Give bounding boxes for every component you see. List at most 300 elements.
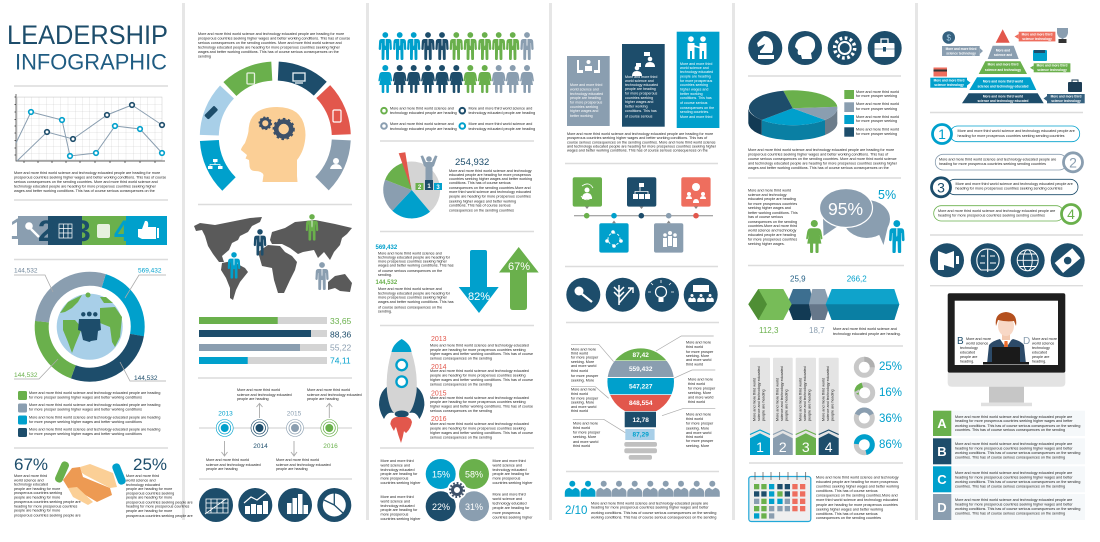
rocket milestones: higher wages and better working conditions. This has of course [430, 431, 533, 435]
percent labels [879, 361, 902, 451]
donut legend: for more prosper seeking higher wages and better working conditions [29, 408, 142, 412]
lettered list: countries. This has of course serious consequences on the sending [955, 512, 1065, 516]
bulb callouts: third world [571, 392, 588, 396]
pyramid [962, 29, 1044, 103]
speech text: countries.More and more third [748, 224, 797, 228]
timeline: people are heading [276, 467, 308, 471]
bulb callouts: seeking. More [688, 391, 711, 395]
bulb callouts: seeking. More [686, 354, 709, 358]
text beside percent circles: people are heading for [380, 508, 418, 512]
bulb callouts: for more prosper [571, 396, 599, 400]
calendar description: educated people are heading for more prosperous [816, 480, 898, 484]
text beside percent circles: countries seeking higher [380, 481, 421, 485]
four percent circles with gear: 22% [432, 502, 450, 512]
percent labels: 25% [879, 361, 902, 373]
bulb callouts: for more prosper [686, 422, 714, 426]
numbered vertical cards: science and technology educated [803, 366, 807, 421]
column 2 intro text: prosperous countries seeking higher wages and better working conditions. This has of course [198, 36, 350, 40]
column dividers [182, 3, 918, 520]
monitor [948, 293, 1065, 406]
rocket milestones [430, 336, 533, 440]
rocket milestones: More and more third world science and technology educated [430, 344, 529, 348]
calendar [749, 472, 811, 522]
pyramid icons: $ [946, 34, 951, 42]
hexagon prism chart: 25,9 [790, 274, 806, 284]
pie description: course serious consequences on the sending countries. More and more third world science [748, 157, 897, 161]
line chart [14, 94, 165, 163]
text beside percent circles: technology educated [380, 504, 415, 508]
ring of technology icons [182, 44, 369, 230]
bulb callouts: More and more [688, 378, 713, 382]
rocket milestones: serious consequences on the sending [430, 409, 492, 413]
monitor callouts: More and more [1032, 337, 1057, 341]
numbered vertical cards: people are heading [784, 389, 788, 421]
calendar description: conditions. This has of course serious [816, 489, 878, 493]
speech text: seeking higher wages and [748, 206, 791, 210]
bulb callouts: for more prosper [686, 439, 714, 443]
pyramid: More and [996, 48, 1010, 52]
hexagon prism chart: 112,3 [759, 326, 779, 335]
three stepped info cards: higher wages and [625, 100, 653, 104]
text beside percent circles: more prosperous [380, 476, 409, 480]
pictogram legend: More and more third world science and [468, 122, 532, 126]
numbered vertical cards: people are heading [762, 389, 766, 421]
pyramid callouts: More and more third [1051, 94, 1081, 98]
puzzle banner: 2 [38, 215, 55, 248]
pie stat and text: conditions. This has of course serious [449, 181, 511, 185]
three stepped info cards: sending countries. [680, 110, 709, 114]
3D pie chart [748, 90, 837, 140]
numbered vertical cards [750, 358, 839, 455]
lettered list: B [937, 444, 947, 459]
lettered list: heading for more prosperous countries seeking higher wages and better [955, 419, 1073, 423]
timeline: science and technology educated [206, 463, 261, 467]
three stepped info cards: technology educated [680, 70, 713, 74]
icon: handshake [54, 460, 127, 505]
bulb callouts: for more prosper [688, 386, 716, 390]
title [7, 20, 168, 74]
lettered list: C [937, 472, 947, 487]
pyramid: science and [994, 53, 1012, 57]
numbered vertical cards: 2 [779, 439, 787, 455]
column 2 intro text: wages and better working conditions. This has of course serious consequences on the [198, 50, 339, 54]
three stepped info cards: technology educated [625, 83, 658, 87]
stat 67%: More and more third [14, 474, 47, 478]
bulb callouts: More and more [573, 422, 598, 426]
bulb callouts: More and more [686, 412, 711, 416]
numbered pill 4: 4 [1067, 206, 1075, 222]
light bulb chart [607, 348, 674, 460]
pie description: and technology educated people are heading for more prosperous countries seeking higher [748, 162, 898, 166]
timeline: people are heading [206, 467, 238, 471]
lettered list: working conditions. This has of course serious consequences on the sending [955, 451, 1080, 455]
numbered vertical cards: 1 [756, 439, 764, 455]
2/10 people pictogram [565, 481, 720, 520]
pie stat and text: people are heading for more prosperous countries [449, 194, 531, 198]
pyramid: More and more third world [983, 80, 1023, 84]
timeline: people are heading [307, 397, 339, 401]
pie chart: 2 [418, 185, 422, 191]
hexagon prism chart: 266,2 [847, 274, 867, 284]
speech text: for more prosperous countries [748, 202, 797, 206]
lettered list: heading for more prosperous countries seeking higher wages and better [955, 446, 1073, 450]
column 2 intro text: technology educated people are heading for more prosperous countries seeking higher [198, 46, 341, 50]
bulb callouts [571, 336, 716, 448]
stats beside arrows: of course serious consequences on the [378, 269, 442, 273]
rocket milestones: More and more third world science and technology educated [430, 396, 529, 400]
pyramid: science and technology educated [977, 84, 1029, 88]
timeline: 2013 [218, 410, 233, 418]
text beside percent circles: countries seeking higher [492, 516, 533, 520]
donut labels: 144,532 [134, 375, 158, 382]
calendar description: consequences on the sending countries [816, 516, 881, 520]
text beside percent circles: more prosperous [492, 476, 521, 480]
numbered vertical cards: 3 [802, 439, 810, 455]
lettered list: A [937, 416, 947, 431]
bulb callouts: seeking. More [571, 378, 594, 382]
pie chart: 1 [427, 184, 431, 190]
numbered pill 3: 3 [937, 180, 945, 196]
3D pie legend: for more prosper seeking [856, 94, 897, 98]
cards description: prosperous countries seeking higher wages and better working conditions. This has of [567, 136, 708, 140]
timeline: people are heading [237, 397, 269, 401]
numbered vertical cards: More and more third world [798, 378, 802, 421]
pie stat and text: consequences on the sending countries [449, 208, 514, 212]
ring icons [204, 73, 342, 169]
pictogram legend: technology educated people are heading [468, 127, 535, 131]
cards description: course serious consequences on the sending countries. More and more third world science [567, 140, 716, 144]
stat 25%: people are heading for more [126, 487, 172, 491]
three stepped info cards: better working [570, 114, 593, 118]
lettered list: More and more third world science and technology educated people are [955, 415, 1072, 419]
donut legend: More and more third world science and technology educated people are heading [29, 391, 160, 395]
progress bars [199, 316, 352, 366]
three stepped info cards: countries seeking [625, 96, 653, 100]
monitor callouts: technology [1032, 346, 1050, 350]
three stepped info cards: countries seeking [680, 83, 708, 87]
three stepped info cards: world science and [680, 66, 709, 70]
pyramid icons [934, 28, 1082, 92]
numbered pill 3 [932, 178, 1078, 197]
pyramid callouts: More and more third [946, 47, 976, 51]
speech text: educated people are heading [748, 233, 796, 237]
world map with people [194, 214, 352, 300]
lettered list: countries. This has of course serious consequences on the sending [955, 484, 1065, 488]
title: LEADERSHIP [7, 20, 168, 50]
monitor callouts: B [957, 336, 964, 347]
cards description: More and more third world science and technology educated people are heading for more [567, 132, 713, 136]
monitor callouts [957, 336, 1057, 364]
speech bubbles [806, 188, 905, 253]
three stepped info cards: technology educated [570, 92, 603, 96]
speech text: world science and technology [748, 228, 797, 232]
pie stat and text: seeking higher wages and better working [449, 200, 516, 204]
pyramid: More and more third [988, 62, 1018, 66]
light bulb chart: 87,42 [633, 352, 649, 359]
column 2 intro text: sending [198, 54, 211, 58]
arrow up 67% [499, 247, 539, 310]
stats beside arrows: sending. [378, 310, 392, 314]
monitor callouts: D [1023, 336, 1030, 347]
speech text: consequences on the sending [748, 220, 797, 224]
3D pie legend: More and more third world [856, 102, 899, 106]
timeline: science and technology educated [307, 393, 362, 397]
puzzle banner: 4 [114, 215, 131, 248]
pyramid callouts: science technology [1051, 99, 1081, 103]
column 2 intro text: More and more third world science and technology educated people are heading for more [198, 32, 344, 36]
timeline: More and more third world [307, 388, 350, 392]
arrow up 67%: 67% [508, 261, 530, 273]
bulb callouts: More and more [571, 348, 596, 352]
stats beside arrows: technology educated people are heading for [378, 292, 451, 296]
stat 67%: heading for more prosperous countries [14, 504, 77, 508]
pie stat and text: educated people are heading for more prosperous [449, 173, 531, 177]
donut labels: 144,532 [14, 372, 38, 379]
pyramid callouts: More and more third [1037, 64, 1067, 68]
stat 67%: people are heading for more [14, 496, 60, 500]
three stepped info cards: More and more third [680, 62, 712, 66]
numbered pill 1 [932, 124, 1080, 144]
bulb callouts: and more world [571, 405, 596, 409]
rocket milestones: higher wages and better working conditions. This has of course [430, 378, 533, 382]
pyramid callouts: More and more third [934, 78, 964, 82]
2/10 people pictogram: working conditions. This has of course serious consequences on the sending [591, 511, 716, 515]
stat 67%: prosperous countries seeking people are [14, 500, 81, 504]
lettered list: heading for more prosperous countries seeking higher wages and better [955, 502, 1073, 506]
light bulb chart: 848,554 [629, 400, 653, 407]
stat 25%: people are heading for more [126, 509, 172, 513]
monitor callouts: world science [1032, 342, 1054, 346]
speech text: More and more third world [748, 188, 791, 192]
bulb callouts: third world [688, 400, 705, 404]
pie stat and text: More and more third world science and technology [449, 169, 532, 173]
text beside percent circles: countries seeking higher [380, 517, 421, 521]
donut legend [18, 391, 160, 437]
2/10 people pictogram: heading for more prosperous countries seeking higher wages and better [591, 506, 709, 510]
bulb callouts: and more world [573, 440, 598, 444]
text beside percent circles: people are heading for [492, 472, 530, 476]
calendar description: consequences on the sending countries.More and [816, 494, 898, 498]
pyramid callouts: science technology [1037, 68, 1067, 72]
speech text: has of course serious [748, 215, 783, 219]
monitor callouts: educated [960, 350, 975, 354]
light bulb chart: 12,78 [633, 417, 649, 424]
rocket [379, 339, 424, 443]
pie chart [383, 152, 442, 218]
rocket milestones: 2013 [431, 336, 447, 343]
numbered vertical cards: More and more third world [776, 378, 780, 421]
title: INFOGRAPHIC [15, 50, 167, 74]
speech bubbles: 95% [828, 199, 863, 219]
3D pie legend [844, 90, 899, 137]
stats beside arrows [376, 245, 454, 314]
lettered list: D [937, 500, 947, 515]
pie stat and text: consequences on the sending countries.More and [449, 186, 531, 190]
chart description: serious consequences on the sending countries. More and more third world science and [14, 180, 158, 184]
pictogram people [378, 32, 534, 93]
numbered pill 3: heading for more prosperous countries seeking sending countries [956, 186, 1063, 190]
numbered pill 4: More and more third world science and technology educated people are [938, 209, 1055, 213]
three stepped info cards: higher wages and [680, 88, 708, 92]
lettered list: More and more third world science and technology educated people are [955, 498, 1072, 502]
three stepped info cards: conditions. This has [625, 109, 657, 113]
pyramid callouts [930, 32, 1085, 103]
stat 25%: technology educated [126, 483, 160, 487]
timeline: 2015 [287, 410, 302, 418]
rocket milestones: people are heading for more prosperous countries seeking [430, 400, 526, 404]
timeline: science and technology educated [237, 393, 292, 397]
rocket milestones: More and more third world science and technology educated [430, 369, 529, 373]
four percent circles with gear: 15% [432, 470, 450, 480]
stats beside arrows: more prosperous countries seeking higher [378, 296, 448, 300]
donut legend: for more prosper seeking higher wages and better working conditions [29, 396, 142, 400]
text beside percent circles: more prosperous [492, 511, 521, 515]
pyramid: More and more third world [983, 94, 1023, 98]
pictogram legend: technology educated people are heading [468, 111, 535, 115]
stats beside arrows: technology educated people are heading for [378, 256, 451, 260]
bulb callouts: and more world [686, 358, 711, 362]
text beside percent circles: world science and [380, 500, 410, 504]
donut legend: for more prosper seeking higher wages and better working conditions [29, 420, 142, 424]
pyramid callouts: science technology [946, 52, 976, 56]
stats beside arrows: 569,432 [376, 245, 398, 251]
pictogram legend: More and more third world science and [390, 106, 454, 110]
lettered list: countries. This has of course serious consequences on the sending [955, 428, 1065, 432]
three stepped info cards: for more prosperous [625, 92, 658, 96]
donut labels [14, 268, 166, 382]
stat 67%: technology educated [14, 482, 48, 486]
progress bars: 74,11 [330, 356, 351, 366]
progress bars: 55,22 [330, 342, 352, 352]
rocket milestones: people are heading for more prosperous countries seeking [430, 374, 526, 378]
text beside percent circles: more prosperous [380, 512, 409, 516]
three stepped info cards: countries seeking [570, 105, 598, 109]
three stepped info cards: of course serious [625, 114, 653, 118]
calendar description: more third world science and technology educated [816, 498, 898, 502]
numbered vertical cards: science and technology educated [826, 366, 830, 421]
bulb callouts: seeking. More [686, 444, 709, 448]
bulb callouts: for more prosper [573, 430, 601, 434]
rocket milestones: serious consequences on the sending [430, 356, 492, 360]
stat 67%: people are heading for more [14, 508, 60, 512]
percent labels: 36% [879, 413, 902, 425]
three stepped info cards: for more prosperous [570, 100, 603, 104]
stat 25%: 25% [133, 455, 167, 474]
calendar description: people are heading for more prosperous countries [816, 503, 898, 507]
bulb callouts: for more prosper [571, 356, 599, 360]
bulb callouts: third world [573, 444, 590, 448]
puzzle banner: 1 [10, 213, 27, 246]
three stepped info cards: for more prosperous [680, 79, 713, 83]
four percent circles with gear [426, 459, 489, 521]
arrow down 82% [459, 250, 499, 313]
rocket milestones: More and more third world science and technology educated [430, 422, 529, 426]
monitor callouts: heading. [960, 360, 974, 364]
hexagon prism chart: 18,7 [809, 326, 825, 335]
rocket milestones: people are heading for more prosperous countries seeking [430, 426, 526, 430]
bulb callouts: and more world [688, 396, 713, 400]
pyramid callouts: science technology [1022, 37, 1052, 41]
three stepped info cards: consequences on the [680, 106, 714, 110]
bulb callouts: third world [571, 369, 588, 373]
numbered pill 4 [934, 204, 1080, 224]
timeline [199, 388, 362, 471]
bulb callouts: third world [571, 352, 588, 356]
speech bubbles: 5% [878, 188, 896, 202]
speech text: educated people are heading [748, 197, 796, 201]
bulb callouts: third world [573, 426, 590, 430]
numbered vertical cards: More and more third world [752, 378, 756, 421]
icons: chess head gear briefcase [748, 31, 902, 65]
stats beside arrows: wages and better working conditions. This has [378, 300, 454, 304]
speech text: science and technology [748, 193, 787, 197]
numbered pill 3: More and more third world science and technology educated people are [956, 182, 1073, 186]
3D pie legend: for more prosper seeking [856, 119, 897, 123]
numbered vertical cards: science and technology educated [757, 366, 761, 421]
percent labels: 86% [879, 439, 902, 451]
speech text: seeking higher wages. [748, 242, 785, 246]
lettered list: More and more third world science and technology educated people are [955, 442, 1072, 446]
pictogram legend: technology educated people are heading [390, 111, 457, 115]
text beside percent circles: More and more third [380, 459, 414, 463]
rocket milestones: people are heading for more prosperous countries seeking [430, 348, 526, 352]
cards description: and technology educated people are heading for more prosperous countries seeking higher [567, 144, 717, 148]
bulb callouts: for more prosper [686, 350, 714, 354]
puzzle banner [10, 213, 167, 248]
text beside percent circles: people are heading for [492, 506, 530, 510]
stat 25%: prosperous countries seeking [126, 492, 174, 496]
stat 25%: prosperous countries seeking people are [126, 514, 193, 518]
monitor callouts: heading. [1032, 360, 1046, 364]
pie stat and text: more third world science and technology educated [449, 190, 531, 194]
3D pie legend: for more prosper seeking [856, 107, 897, 111]
stat 25%: prosperous countries seeking people are [126, 500, 193, 504]
bulb callouts: third world [686, 435, 703, 439]
monitor callouts: world science [966, 342, 988, 346]
2/10 people pictogram: More and more third world science and technology educated people are [591, 502, 708, 506]
stats beside arrows: sending. [378, 273, 392, 277]
stat 25%: heading for more prosperous countries [126, 504, 189, 508]
text beside percent circles: technology educated [492, 502, 527, 506]
three stepped info cards: conditions. This has [680, 96, 712, 100]
calendar description: seeking higher wages and better working [816, 508, 883, 512]
3D pie legend: for more prosper seeking [856, 132, 897, 136]
lettered list: heading for more prosperous countries seeking higher wages and better [955, 476, 1073, 480]
rocket milestones: 2015 [431, 390, 447, 398]
stat 67%: prosperous countries seeking [14, 491, 62, 495]
monitor callouts: people are [960, 355, 977, 359]
numbered vertical cards: people are heading [808, 389, 812, 421]
2/10 people pictogram: working conditions. This has of course serious consequences on the sending [591, 516, 716, 520]
three stepped info cards: world science and [570, 88, 599, 92]
chart description: wages and better working conditions. This has of course serious consequences on the [14, 189, 155, 193]
three stepped info cards: More and more third [680, 115, 712, 119]
stat 25%: people are heading for more [126, 496, 172, 500]
icons: megaphone brain globe money [930, 243, 1085, 277]
numbered pill 2 [935, 153, 1082, 172]
donut legend: More and more third world science and technology educated people are heading [29, 428, 160, 432]
pie description: wages and better working conditions. This has of course serious consequences on the [748, 166, 889, 170]
bulb callouts: third world [686, 362, 703, 366]
numbered pill 2: heading for more prosperous countries seeking sending countries [939, 162, 1046, 166]
donut chart with globe [28, 265, 151, 388]
pie stat and text [449, 157, 532, 212]
stats beside arrows: More and more third world science and [378, 287, 442, 291]
stat 25%: More and more third [126, 474, 159, 478]
icons: charts row [199, 488, 351, 522]
stat 25%: world science and [126, 478, 156, 482]
pie chart: 3 [436, 185, 440, 191]
